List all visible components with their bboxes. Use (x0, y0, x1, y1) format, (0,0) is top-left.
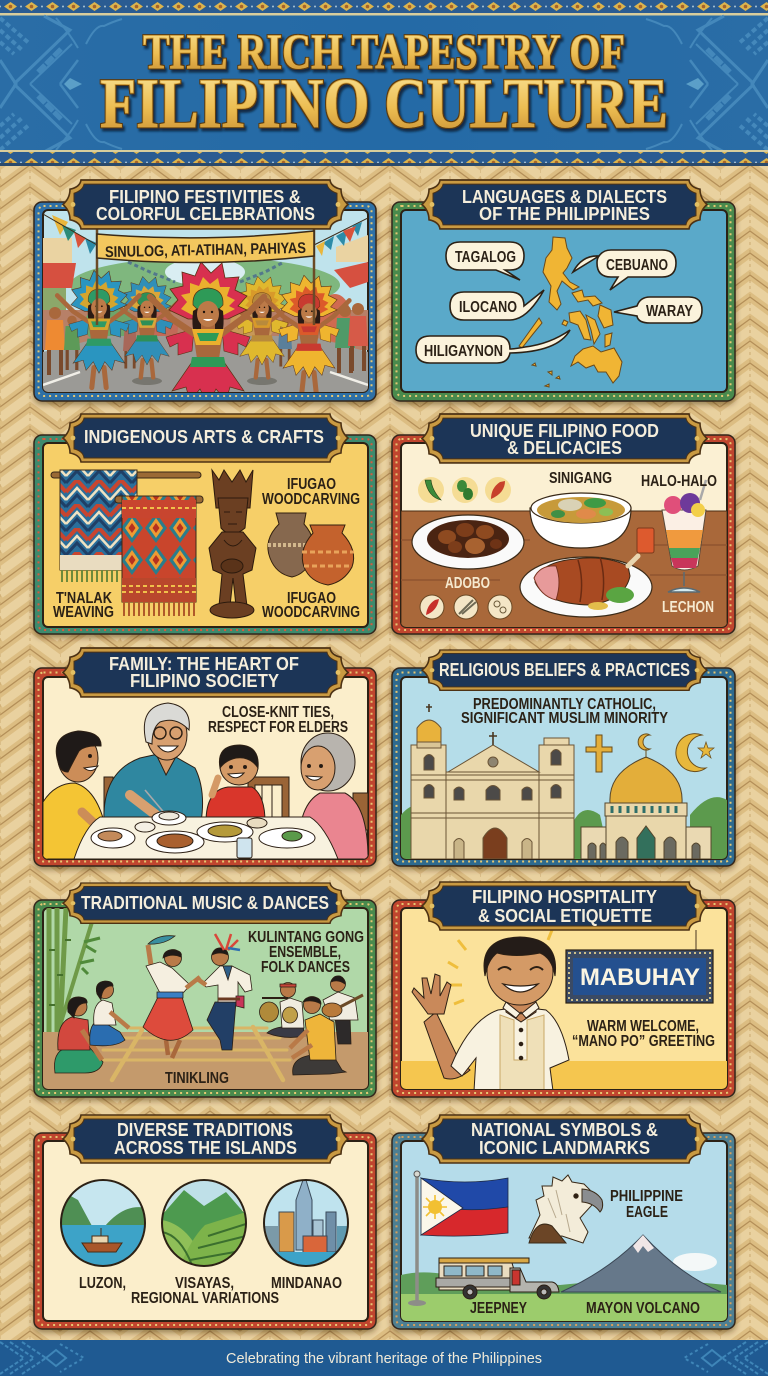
heading plaque (63, 648, 348, 697)
heading plaque: NATIONAL SYMBOLS & (471, 1120, 658, 1140)
region labels: REGIONAL VARIATIONS (131, 1290, 279, 1307)
bubble: Hiligaynon (416, 330, 570, 363)
food labels (445, 470, 717, 616)
bubble: Cebuano (573, 250, 676, 290)
heading plaque: FILIPINO SOCIETY (130, 671, 279, 691)
title: FILIPINO CULTURE (100, 65, 668, 143)
craft labels: WOODCARVING (262, 604, 360, 621)
heading plaque: & SOCIAL ETIQUETTE (478, 906, 652, 926)
Mabuhay sign (566, 930, 713, 1003)
dancing man (196, 934, 252, 1050)
seated women (54, 981, 129, 1073)
region labels: VISAYAS, (175, 1275, 234, 1292)
bamboo (49, 908, 100, 1032)
heading plaque: RELIGIOUS BELIEFS & PRACTICES (439, 660, 690, 680)
heading plaque (422, 882, 707, 930)
lechon plate (520, 556, 652, 617)
Philippine eagle (529, 1175, 603, 1243)
language labels: WARAY (646, 303, 694, 320)
heading plaque: ACROSS THE ISLANDS (114, 1138, 297, 1158)
language labels: TAGALOG (455, 249, 516, 266)
Mayon volcano (561, 1235, 721, 1292)
region labels: LUZON, (79, 1275, 126, 1292)
craft labels: IFUGAO (287, 590, 336, 607)
religion caption (461, 696, 669, 727)
panel: languages (392, 180, 735, 401)
region labels (79, 1275, 342, 1307)
heading plaque (422, 414, 707, 463)
symbol labels: EAGLE (626, 1204, 668, 1221)
craft labels: WEAVING (53, 604, 114, 621)
heading plaque: FAMILY: THE HEART OF (109, 654, 299, 674)
small crescent (638, 734, 650, 758)
jeepney (436, 1258, 559, 1299)
symbol labels: JEEPNEY (470, 1300, 528, 1317)
ingredient icons (418, 477, 512, 619)
panel: music and dance (34, 883, 376, 1097)
table with dishes (74, 811, 338, 859)
heading plaque: DIVERSE TRADITIONS (117, 1120, 293, 1140)
panel: arts and crafts (34, 414, 376, 634)
child (206, 745, 265, 822)
panel: festivities (34, 180, 376, 425)
banner poles (97, 228, 314, 325)
dance captions: TINIKLING (165, 1070, 229, 1087)
heading plaque: & DELICACIES (507, 438, 622, 458)
flag (408, 1171, 508, 1306)
tinikling poles (102, 1027, 290, 1080)
wooden table (401, 511, 727, 629)
footer band (0, 1340, 768, 1376)
circle: Luzon seascape (60, 1180, 146, 1267)
clay pots (268, 513, 354, 585)
dance captions: FOLK DANCES (261, 959, 350, 976)
banner (97, 231, 314, 263)
food labels: ADOBO (445, 575, 490, 592)
panel: national symbols (392, 1115, 735, 1329)
trees (401, 797, 727, 860)
family caption (208, 704, 348, 736)
circle: Visayas terraces (162, 1180, 246, 1267)
header band (0, 0, 768, 166)
craft labels (53, 476, 360, 621)
language labels: ILOCANO (459, 299, 517, 316)
craft labels: WOODCARVING (262, 491, 360, 508)
family caption: RESPECT FOR ELDERS (208, 719, 348, 736)
greeting man (412, 930, 584, 1091)
Mabuhay sign: MABUHAY (580, 964, 700, 991)
festival street scene (43, 214, 368, 392)
greeting caption: WARM WELCOME, (587, 1018, 699, 1035)
family at dinner (43, 703, 368, 859)
food labels: LECHON (662, 599, 714, 616)
symbol labels: MAYON VOLCANO (586, 1300, 700, 1317)
church (411, 704, 574, 859)
crescent and star (676, 734, 714, 772)
small sauce glass (637, 528, 654, 553)
heading plaque (422, 180, 707, 229)
craft labels: IFUGAO (287, 476, 336, 493)
title (100, 23, 668, 143)
bunting flags (43, 214, 368, 256)
religion caption: PREDOMINANTLY CATHOLIC, (473, 696, 656, 713)
adobo plate (412, 515, 524, 569)
panel: island traditions (34, 1115, 376, 1329)
heading plaque (63, 180, 348, 229)
heading plaque: COLORFUL CELEBRATIONS (96, 204, 315, 224)
heading plaque: FILIPINO FESTIVITIES & (109, 187, 301, 207)
symbol labels: PHILIPPINE (610, 1188, 683, 1205)
heading plaque (63, 414, 348, 462)
crowd (45, 303, 368, 375)
food labels: SINIGANG (549, 470, 612, 487)
dancers (55, 263, 352, 392)
circle: Mindanao city (264, 1180, 348, 1267)
heading plaque: ICONIC LANDMARKS (479, 1138, 650, 1158)
panel: food (392, 414, 735, 634)
heading plaque (422, 650, 707, 690)
heading plaque: INDIGENOUS ARTS & CRAFTS (84, 427, 324, 447)
musicians (260, 976, 363, 1075)
title: THE RICH TAPESTRY OF (143, 23, 625, 79)
woven textiles (51, 470, 203, 616)
heading plaque: TRADITIONAL MUSIC & DANCES (81, 893, 329, 913)
heading plaque: OF THE PHILIPPINES (479, 204, 650, 224)
landscape (673, 1253, 717, 1271)
bubble: Waray (614, 297, 702, 323)
dance captions: ENSEMBLE, (269, 944, 341, 961)
chairs (104, 777, 368, 830)
ground (43, 1032, 368, 1090)
food labels: HALO-HALO (641, 473, 717, 490)
panel: family (34, 648, 376, 866)
religion caption: SIGNIFICANT MUSLIM MINORITY (461, 710, 669, 727)
carved statue (209, 470, 256, 618)
heading plaque: FILIPINO HOSPITALITY (472, 887, 657, 907)
heading plaque (63, 1115, 348, 1163)
heading plaque (422, 1115, 707, 1163)
dancing woman (143, 936, 200, 1058)
mosque (581, 757, 711, 859)
heading plaque: UNIQUE FILIPINO FOOD (470, 421, 659, 441)
dance captions: KULINTANG GONG (248, 929, 364, 946)
family caption: CLOSE-KNIT TIES, (222, 704, 334, 721)
cross symbol (586, 735, 612, 772)
sinigang bowl (530, 493, 631, 548)
speech bubbles (416, 242, 702, 363)
halo-halo glass (662, 480, 706, 592)
bubble: Tagalog (446, 242, 524, 280)
panel: religion (392, 650, 735, 866)
language labels: CEBUANO (606, 257, 668, 274)
language labels: HILIGAYNON (424, 343, 503, 360)
craft labels: T'NALAK (56, 590, 113, 607)
bubble: Ilocano (450, 290, 544, 320)
panel: hospitality (392, 882, 735, 1097)
young man (43, 730, 103, 859)
heading plaque (63, 883, 348, 923)
map of the Philippines (519, 237, 622, 387)
language labels (424, 249, 694, 360)
grandmother (300, 732, 368, 859)
greeting caption: “MANO PO” GREETING (572, 1033, 715, 1050)
region labels: MINDANAO (271, 1275, 342, 1292)
grandfather (104, 703, 203, 822)
dance captions (165, 929, 364, 1087)
heading plaque: LANGUAGES & DIALECTS (462, 187, 667, 207)
banner: SINULOG, ATI-ATIHAN, PAHIYAS (105, 240, 306, 261)
greeting caption (572, 1018, 715, 1050)
footer band: Celebrating the vibrant heritage of the Philippines (226, 1350, 542, 1367)
symbol labels (470, 1188, 700, 1317)
